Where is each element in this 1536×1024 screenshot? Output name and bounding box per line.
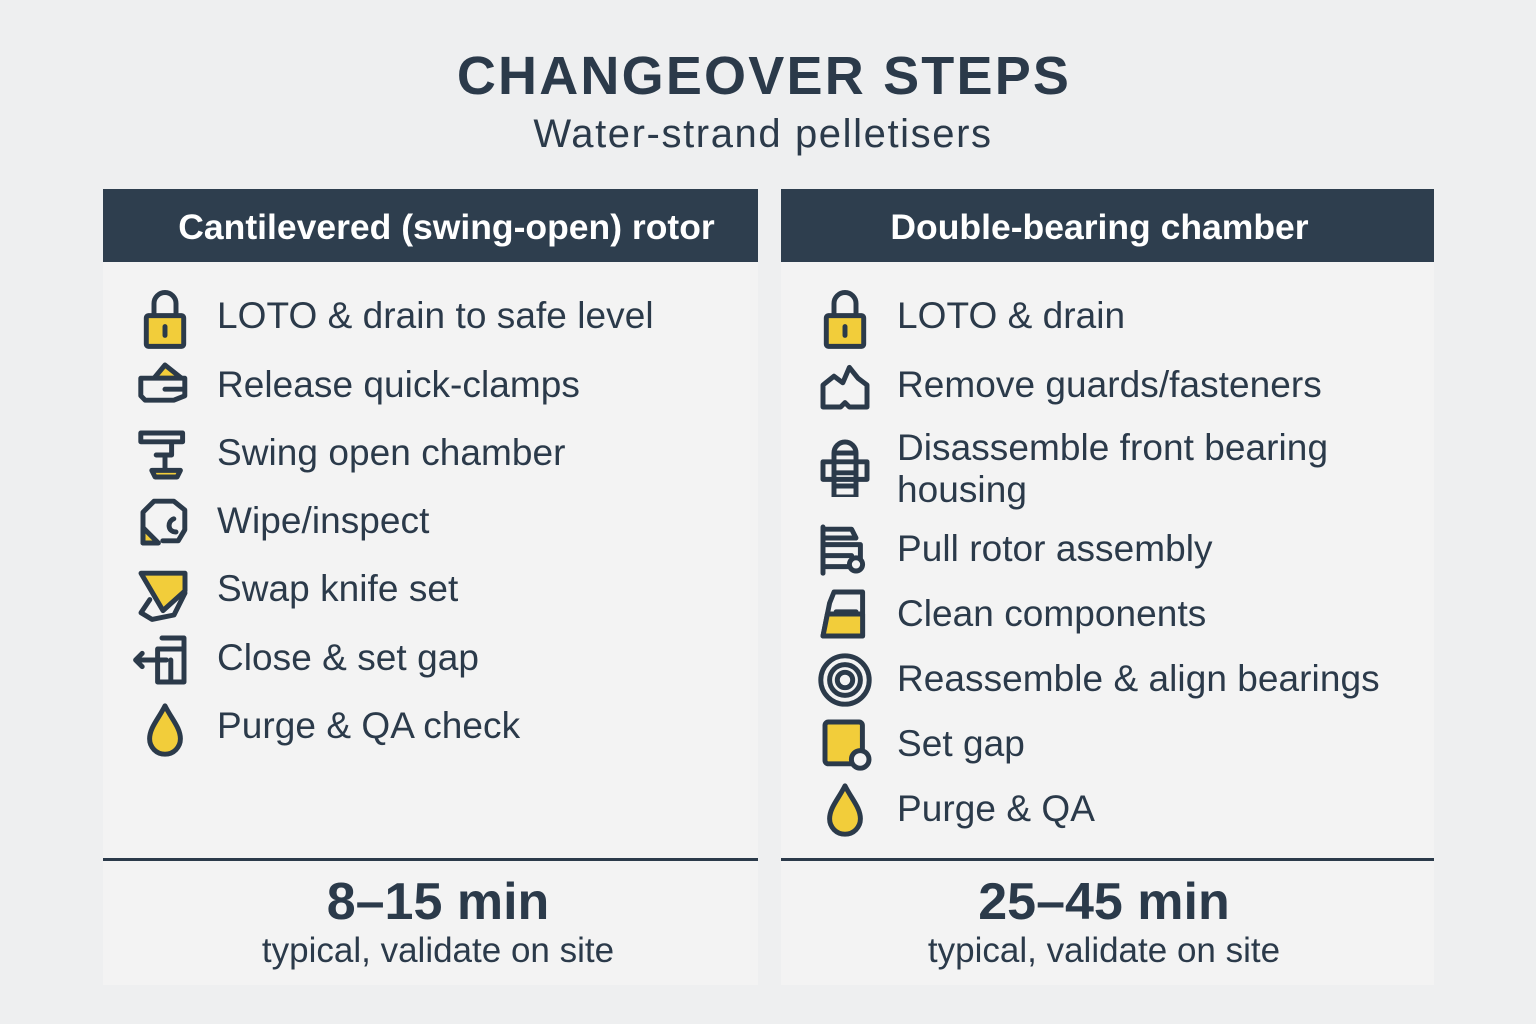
step 5: Swap knife set xyxy=(217,568,458,609)
time: double-bearing: typical, validate on site xyxy=(928,931,1280,970)
step 3: Disassemble front bearing xyxy=(897,427,1328,468)
panel: double-bearing xyxy=(781,189,1434,985)
panel: cantilevered xyxy=(103,189,758,985)
time: cantilevered: typical, validate on site xyxy=(262,931,614,970)
header: cantilevered: Cantilevered (swing-open) rotor xyxy=(178,207,715,247)
step 7: Set gap xyxy=(897,723,1025,764)
icon: close gap xyxy=(133,636,186,684)
subtitle: Water-strand pelletisers xyxy=(533,112,993,156)
icon: wipe xyxy=(140,498,188,546)
icon: target xyxy=(818,653,872,707)
divider xyxy=(103,858,758,861)
icon: bearing xyxy=(820,440,870,497)
icon: drop xyxy=(827,783,863,837)
step 6: Reassemble & align bearings xyxy=(897,658,1380,699)
step 4: Wipe/inspect xyxy=(217,500,429,541)
step 5: Clean components xyxy=(897,593,1206,634)
icon: lock xyxy=(824,290,866,349)
step 1: LOTO & drain xyxy=(897,295,1125,336)
header: double-bearing xyxy=(781,189,1434,262)
icon: clamp xyxy=(138,362,188,403)
icon: set gap xyxy=(822,720,872,771)
icon: drop xyxy=(147,703,183,757)
step 2: Remove guards/fasteners xyxy=(897,364,1322,405)
time: cantilevered xyxy=(262,873,614,970)
step 6: Close & set gap xyxy=(217,637,479,678)
step 3 xyxy=(897,427,1328,510)
icon: lock xyxy=(144,290,186,349)
icon: tap xyxy=(138,430,186,480)
step 8: Purge & QA xyxy=(897,788,1095,829)
time: double-bearing xyxy=(928,873,1280,970)
icon: guards xyxy=(820,364,870,410)
step 4: Pull rotor assembly xyxy=(897,528,1213,569)
icon: knife xyxy=(138,570,188,622)
step 7: Purge & QA check xyxy=(217,705,520,746)
header: cantilevered xyxy=(103,189,758,262)
step 1: LOTO & drain to safe level xyxy=(217,295,654,336)
title: CHANGEOVER STEPS xyxy=(457,46,1071,106)
step 3: Swing open chamber xyxy=(217,432,566,473)
time: cantilevered: 8–15 min xyxy=(327,873,549,931)
icon: clean xyxy=(820,590,866,638)
step 3: housing xyxy=(897,469,1027,510)
icon: pull rotor xyxy=(820,524,866,576)
time: double-bearing: 25–45 min xyxy=(978,873,1230,931)
step 2: Release quick-clamps xyxy=(217,364,580,405)
header: double-bearing: Double-bearing chamber xyxy=(890,207,1309,247)
divider xyxy=(781,858,1434,861)
